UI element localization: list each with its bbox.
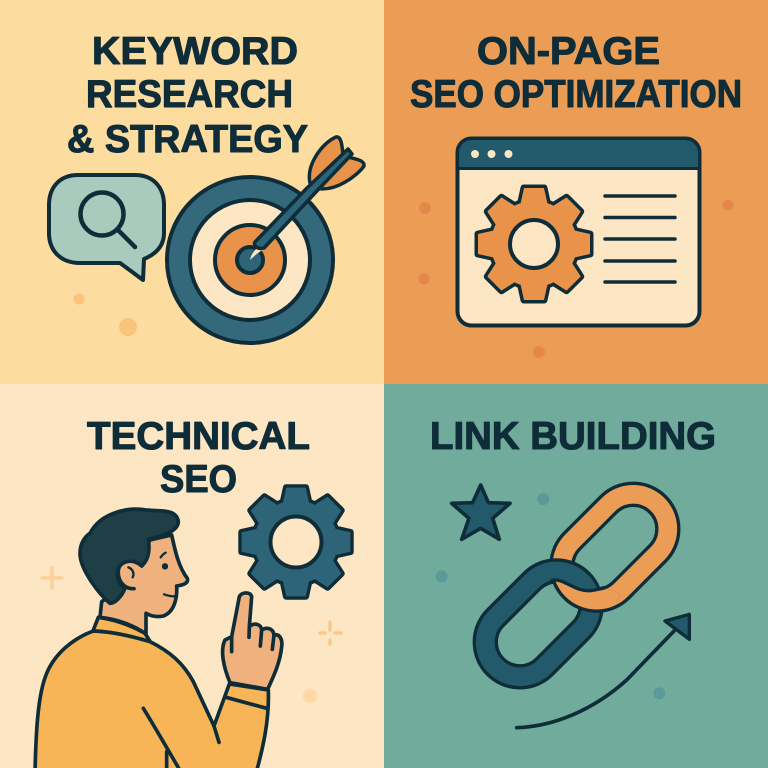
- browser title bar: [458, 140, 699, 168]
- heading: on-page SEO optimization: [410, 30, 742, 116]
- icon: speech bubble with magnifier: [49, 175, 164, 280]
- heading: technical SEO: SEO: [160, 458, 237, 501]
- heading: keyword research and strategy: KEYWORD: [92, 30, 298, 73]
- icon: target with dart: [167, 137, 364, 343]
- decorative sparkles and dot: [42, 568, 341, 703]
- panel: on-page SEO optimization: [384, 0, 768, 384]
- background dots: [436, 493, 665, 699]
- shirt: [35, 631, 268, 768]
- panel: link building: [384, 384, 768, 768]
- heading: technical SEO: [87, 415, 310, 501]
- icons: link, star, arrow: [436, 480, 689, 728]
- arrow: [517, 614, 689, 728]
- decorative dots: [74, 294, 137, 336]
- finger and sleeve lines: [143, 627, 274, 768]
- icon: browser window: [458, 138, 700, 326]
- icon: chain links: [471, 480, 682, 691]
- face details: [128, 553, 177, 596]
- icon: orange gear: [478, 188, 590, 300]
- hair: [80, 509, 178, 603]
- illustration: person pointing at gear: [35, 509, 282, 768]
- heading: technical SEO: TECHNICAL: [87, 415, 310, 458]
- hand: [223, 593, 282, 689]
- heading: keyword research and strategy: RESEARCH: [86, 73, 293, 116]
- icon: blue gear: [242, 488, 350, 596]
- heading: keyword research and strategy: & STRATEGY: [67, 118, 308, 161]
- panel: keyword research and strategy: [0, 0, 384, 384]
- heading: on-page SEO optimization: ON-PAGE: [477, 30, 660, 73]
- heading: keyword research and strategy: [67, 30, 308, 161]
- heading: link building: LINK BUILDING: [430, 415, 716, 458]
- neck and face: [100, 535, 188, 634]
- panel: technical SEO: [0, 384, 384, 768]
- ear: [118, 561, 142, 589]
- icon: star: [452, 485, 510, 539]
- collar: [93, 617, 151, 642]
- decorative dots: [418, 200, 734, 358]
- content lines: [605, 196, 675, 282]
